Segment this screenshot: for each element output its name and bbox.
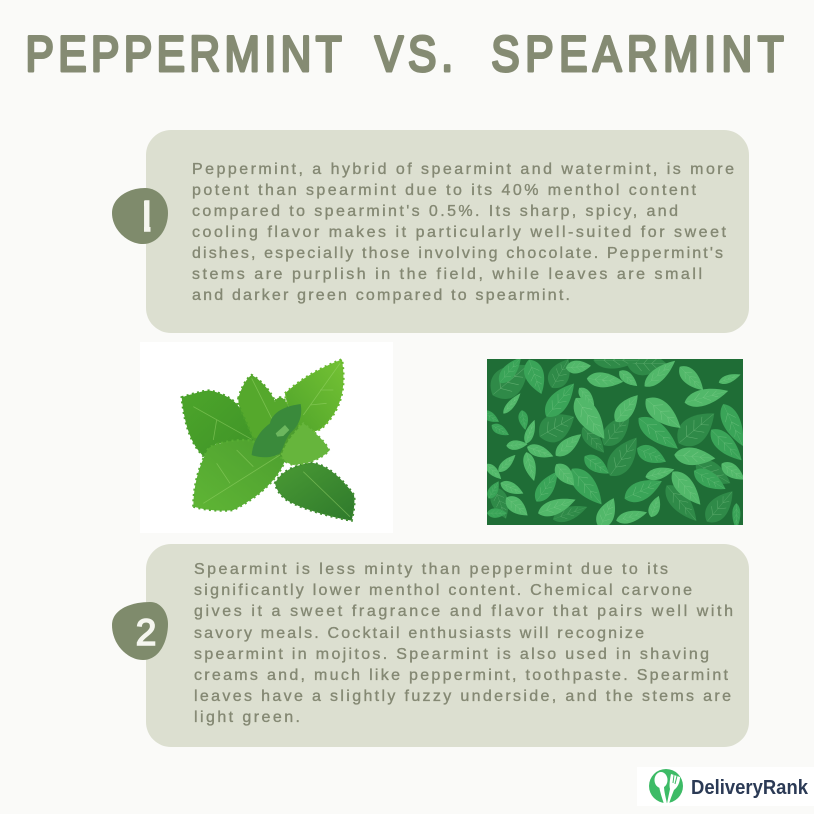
leaf: lower right bbox=[275, 463, 354, 521]
text block: spearmint description: significantly lower menthol content. Chemical carvone bbox=[194, 582, 692, 599]
text block: peppermint description: cooling flavor makes it particularly well-suited for sweet bbox=[192, 224, 727, 241]
text block: spearmint description: Spearmint is less minty than peppermint due to its bbox=[194, 561, 668, 578]
leaf: left bbox=[182, 391, 253, 457]
image: peppermint sprig bbox=[140, 342, 393, 533]
title bbox=[26, 26, 784, 82]
text block: peppermint description: stems are purplish in the field, while leaves are small bbox=[192, 266, 702, 283]
leaf: upper middle bbox=[238, 375, 287, 438]
text block: spearmint description: savory meals. Cocktail enthusiasts will recognize bbox=[194, 625, 644, 642]
text block: spearmint description: leaves have a slightly fuzzy underside, and the stems are bbox=[194, 688, 731, 705]
text block: peppermint description: dishes, especially those involving chocolate. Peppermint's bbox=[192, 245, 723, 262]
panel: peppermint bbox=[146, 130, 749, 333]
icon: green circle with spoon and fork bbox=[649, 769, 683, 804]
number badge 2 bbox=[112, 602, 168, 660]
leaf: lower left bbox=[193, 440, 285, 511]
image: spearmint plants photo bbox=[487, 359, 743, 525]
number badge 2: 2 bbox=[136, 612, 156, 653]
leaf base bbox=[240, 403, 300, 463]
title: VS. bbox=[375, 26, 453, 82]
text block: spearmint description: gives it a sweet fragrance and flavor that pairs well with bbox=[194, 603, 733, 620]
leaf: centre cluster bbox=[252, 404, 301, 457]
logo: DeliveryRank bbox=[637, 767, 814, 806]
leaf: right small bbox=[282, 423, 329, 465]
text block: spearmint description bbox=[194, 561, 733, 726]
text block: spearmint description: creams and, much like peppermint, toothpaste. Spearmint bbox=[194, 667, 729, 684]
leaf: upper right bbox=[285, 359, 343, 431]
text block: peppermint description bbox=[192, 161, 734, 304]
text block: peppermint description: potent than spearmint due to its 40% menthol content bbox=[192, 182, 697, 199]
panel: spearmint bbox=[146, 544, 749, 747]
veins bbox=[193, 363, 350, 517]
text block: spearmint description: light green. bbox=[194, 709, 300, 726]
text block: peppermint description: and darker green compared to spearmint. bbox=[192, 287, 570, 304]
number badge 1: 1 bbox=[134, 192, 158, 241]
number badge 1 bbox=[112, 188, 168, 244]
title: SPEARMINT bbox=[491, 26, 784, 82]
title: PEPPERMINT bbox=[26, 26, 342, 82]
text block: peppermint description: Peppermint, a hybrid of spearmint and watermint, is more bbox=[192, 161, 734, 178]
text block: spearmint description: spearmint in mojitos. Spearmint is also used in shaving bbox=[194, 646, 709, 663]
text block: peppermint description: compared to spearmint's 0.5%. Its sharp, spicy, and bbox=[192, 203, 678, 220]
